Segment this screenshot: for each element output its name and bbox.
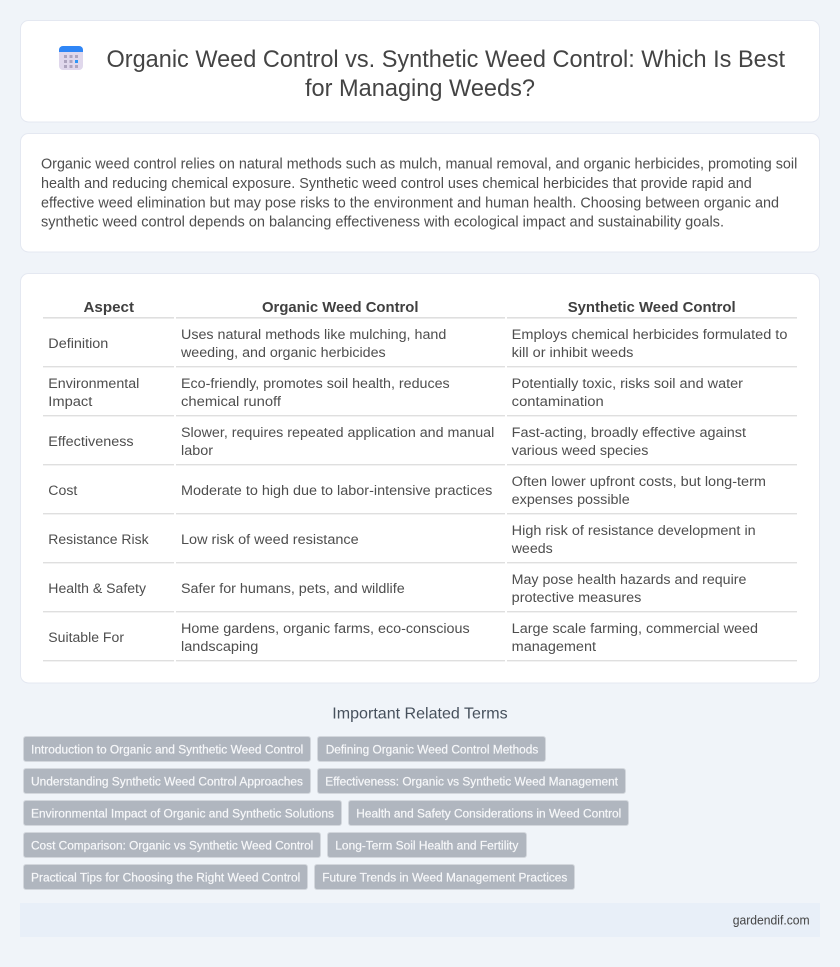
tag [24,800,342,826]
title: Organic Weed Control vs. Synthetic Weed Control: Which Is Best [106,46,785,73]
intro paragraph: effective weed elimination but may pose risks to the environment and human health. Choosing between organic and [41,196,779,212]
row: effectiveness: Fast-acting, broadly effective against [512,425,746,441]
row: resistance risk [48,523,756,557]
table header: Synthetic Weed Control [568,299,736,316]
tag: Cost Comparison: Organic vs Synthetic Weed Control [31,838,313,852]
row: definition: Definition [48,336,108,352]
tag [24,768,310,794]
related terms tags [24,736,628,890]
intro paragraph: health and reducing chemical exposure. Synthetic weed control uses chemical herbicides that provide rapid and [41,176,752,192]
tag: Future Trends in Weed Management Practices [322,870,567,884]
row: cost: Moderate to high due to labor-intensive practices [181,483,492,499]
table header: Aspect [84,299,134,316]
tag [318,768,626,794]
row: suitable for: landscaping [181,639,258,655]
tag: Introduction to Organic and Synthetic Weed Control [31,742,303,756]
tag [314,864,574,890]
row: effectiveness [48,425,746,459]
row: health and safety: May pose health hazards and require [512,572,746,588]
row: definition [48,327,788,361]
row: definition: kill or inhibit weeds [512,345,633,361]
tag: Understanding Synthetic Weed Control Approaches [31,774,303,788]
row: health and safety [48,572,746,606]
tag [328,832,526,858]
row: health and safety: Safer for humans, pets, and wildlife [181,581,405,597]
tag: Effectiveness: Organic vs Synthetic Weed Management [325,774,619,788]
row: resistance risk: Resistance Risk [48,532,149,548]
tag [24,864,308,890]
row: suitable for: Suitable For [48,630,124,646]
row: environmental impact: Impact [48,394,92,410]
row: definition: weeding, and organic herbicides [180,345,386,361]
row: health and safety: Health & Safety [48,581,147,597]
row: environmental impact: Potentially toxic, risks soil and water [512,376,743,392]
row: resistance risk: High risk of resistance development in [512,523,756,539]
tag: Practical Tips for Choosing the Right Weed Control [31,870,300,884]
row: definition: Employs chemical herbicides formulated to [512,327,788,343]
row: cost: Often lower upfront costs, but long-term [512,474,766,490]
tag [24,736,310,762]
row: suitable for: Large scale farming, commercial weed [512,621,758,637]
footer [20,903,820,937]
row: resistance risk: weeds [511,541,553,557]
row: environmental impact: contamination [512,394,604,410]
tag [318,736,546,762]
table header [84,299,736,316]
row: suitable for [48,621,758,655]
panel: title card [20,20,820,122]
intro paragraph: synthetic weed control depends on balancing effectiveness with ecological impact and sustainability goals. [41,214,724,230]
icon: calendar [59,46,83,70]
tag [348,800,628,826]
tag: Defining Organic Weed Control Methods [326,742,538,756]
row: environmental impact: chemical runoff [181,394,281,410]
heading: important related terms: Important Related Terms [332,706,508,722]
row: environmental impact: Eco-friendly, promotes soil health, reduces [181,376,450,392]
row: suitable for: management [512,639,596,655]
panel: introduction [20,134,820,252]
intro paragraph: Organic weed control relies on natural methods such as mulch, manual removal, and organic herbicides, promoting soil [41,156,797,172]
footer source text: gardendif.com [733,913,810,927]
tag [24,832,320,858]
row: environmental impact: Environmental [48,376,139,392]
row: suitable for: Home gardens, organic farms, eco-conscious [181,621,470,637]
row: effectiveness: Effectiveness [48,434,134,450]
title: for Managing Weeds? [305,75,535,102]
tag: Environmental Impact of Organic and Synthetic Solutions [31,806,334,820]
row: effectiveness: labor [181,443,213,459]
row: environmental impact [48,376,743,410]
row: effectiveness: various weed species [512,443,648,459]
row: effectiveness: Slower, requires repeated application and manual [181,425,494,441]
panel: comparison table [20,274,820,683]
row: cost: Cost [48,483,77,499]
table header: Organic Weed Control [262,299,418,316]
intro paragraph [41,156,797,230]
row: resistance risk: Low risk of weed resistance [181,532,359,548]
row: definition: Uses natural methods like mulching, hand [181,327,446,343]
row: cost [48,474,766,508]
title [106,46,785,102]
row: cost: expenses possible [512,492,630,508]
row: health and safety: protective measures [512,590,641,606]
tag: Long-Term Soil Health and Fertility [335,838,519,852]
tag: Health and Safety Considerations in Weed Control [356,806,621,820]
